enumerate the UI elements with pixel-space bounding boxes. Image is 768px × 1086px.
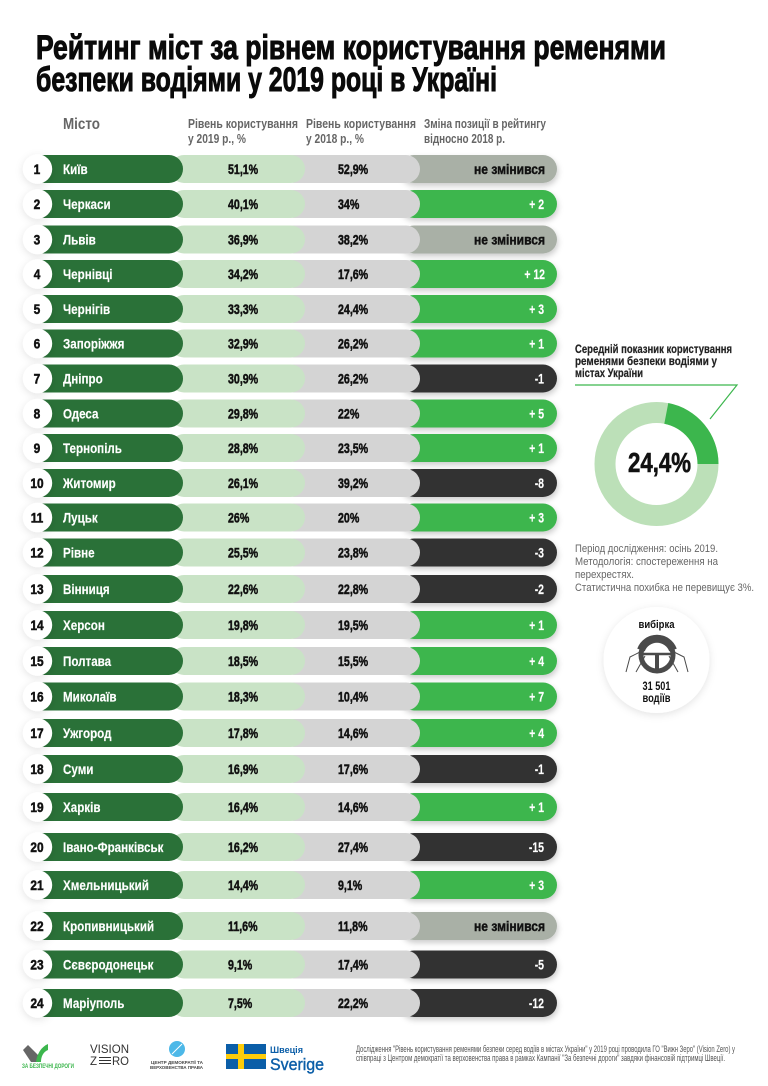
- footnote: [356, 1044, 735, 1063]
- row 6 Запоріжжя: 26,2%: [338, 336, 368, 352]
- logo: Vision Zero: VISION: [90, 1044, 129, 1056]
- row 22 Кропивницький: не змінився: [474, 918, 545, 934]
- row 6 Запоріжжя: + 1: [529, 336, 544, 352]
- row 8 Одеса: 22%: [338, 406, 359, 422]
- row 5 Чернігів: Чернігів: [63, 301, 110, 317]
- sample badge: 31 501: [642, 681, 671, 693]
- row 23 Сєвєродонецьк: Сєвєродонецьк: [63, 956, 154, 973]
- row 11 Луцьк: Луцьк: [63, 509, 98, 526]
- column headers: Рівень користування: [188, 117, 298, 131]
- row 13 Вінниця: -2: [535, 582, 544, 597]
- methodology text: Методологія: спостереження на: [575, 556, 719, 568]
- average heading: ременями безпеки водіями у: [575, 356, 718, 368]
- row 5 Чернігів: 33,3%: [228, 302, 258, 317]
- row 18 Суми: 16,9%: [228, 762, 258, 777]
- row 16 Миколаїв: 10,4%: [338, 689, 368, 705]
- methodology text: перехрестях.: [575, 569, 634, 581]
- logo: Центр демократії та верховенства права: ВЕРХОВЕНСТВА ПРАВА: [150, 1065, 204, 1070]
- row 18 Суми: -1: [535, 762, 544, 777]
- methodology text: [575, 543, 754, 594]
- row 15 Полтава: [23, 646, 557, 676]
- logo: За безпечні дороги: [22, 1044, 74, 1070]
- column headers: Зміна позиції в рейтингу: [424, 117, 546, 131]
- row 16 Миколаїв: [23, 682, 557, 711]
- row 11 Луцьк: [23, 503, 557, 532]
- row 7 Дніпро: 7: [34, 371, 40, 387]
- donut chart 24,4%: [605, 403, 719, 516]
- row 2 Черкаси: 34%: [338, 197, 359, 212]
- row 24 Маріуполь: [23, 988, 557, 1018]
- logo: Центр демократії та верховенства права: ЦЕНТР ДЕМОКРАТІЇ ТА: [151, 1059, 204, 1065]
- row 6 Запоріжжя: 32,9%: [228, 336, 258, 352]
- row 13 Вінниця: Вінниця: [63, 581, 110, 597]
- row 19 Харків: + 1: [529, 800, 544, 815]
- logo: Швеція Sverige: Швеція: [270, 1045, 303, 1055]
- row 13 Вінниця: 22,8%: [338, 582, 368, 597]
- row 12 Рівне: 23,8%: [338, 545, 368, 561]
- row 20 Івано-Франківськ: 16,2%: [228, 840, 258, 855]
- average heading: Середній показник користування: [575, 344, 732, 356]
- row 21 Хмельницький: Хмельницький: [63, 877, 149, 893]
- title: безпеки водіями у 2019 році в Україні: [36, 61, 497, 99]
- row 13 Вінниця: 13: [30, 581, 44, 597]
- row 9 Тернопіль: Тернопіль: [63, 440, 122, 456]
- row 1 Київ: Київ: [63, 161, 88, 177]
- row 6 Запоріжжя: 6: [34, 336, 40, 352]
- row 4 Чернівці: 34,2%: [228, 267, 258, 282]
- row 13 Вінниця: 22,6%: [228, 582, 258, 597]
- sample badge: [604, 607, 710, 713]
- row 3 Львів: 36,9%: [228, 232, 258, 248]
- column headers: Місто: [63, 116, 100, 133]
- row 22 Кропивницький: 11,8%: [338, 919, 368, 934]
- row 21 Хмельницький: 21: [30, 877, 44, 893]
- row 15 Полтава: + 4: [529, 654, 544, 669]
- row 16 Миколаїв: Миколаїв: [63, 688, 117, 705]
- row 17 Ужгород: + 4: [529, 726, 544, 741]
- row 22 Кропивницький: Кропивницький: [63, 918, 154, 934]
- row 24 Маріуполь: -12: [529, 996, 544, 1011]
- row 14 Херсон: [23, 610, 557, 640]
- row 17 Ужгород: 17: [30, 725, 44, 741]
- row 20 Івано-Франківськ: -15: [529, 840, 544, 855]
- logo: Vision Zero: Z: [90, 1056, 97, 1068]
- row 19 Харків: 19: [30, 799, 44, 815]
- row 4 Чернівці: 4: [34, 266, 41, 282]
- row 16 Миколаїв: 18,3%: [228, 689, 258, 705]
- row 2 Черкаси: 40,1%: [228, 197, 258, 212]
- sample badge: водіїв: [642, 693, 670, 705]
- row 7 Дніпро: 26,2%: [338, 371, 368, 387]
- row 5 Чернігів: + 3: [529, 302, 544, 317]
- row 3 Львів: 38,2%: [338, 232, 368, 248]
- row 4 Чернівці: 17,6%: [338, 267, 368, 282]
- row 9 Тернопіль: 9: [34, 440, 40, 456]
- row 17 Ужгород: 17,8%: [228, 726, 258, 741]
- row 18 Суми: [23, 754, 557, 784]
- row 12 Рівне: [23, 538, 557, 567]
- row 20 Івано-Франківськ: Івано-Франківськ: [63, 839, 164, 855]
- row 20 Івано-Франківськ: 20: [30, 839, 44, 855]
- row 22 Кропивницький: 22: [30, 918, 44, 934]
- row 14 Херсон: 19,5%: [338, 618, 368, 633]
- row 9 Тернопіль: 23,5%: [338, 441, 368, 456]
- logo: Центр демократії та верховенства права: [150, 1041, 204, 1070]
- row 11 Луцьк: 11: [31, 510, 43, 526]
- row 1 Київ: 51,1%: [228, 162, 258, 177]
- row 3 Львів: 3: [34, 232, 40, 248]
- row 7 Дніпро: 30,9%: [228, 371, 258, 387]
- logo: За безпечні дороги: ЗА БЕЗПЕЧНІ ДОРОГИ: [22, 1064, 74, 1070]
- row 23 Сєвєродонецьк: [23, 950, 557, 979]
- methodology text: Період дослідження: осінь 2019.: [575, 543, 718, 555]
- icon: steering wheel with hands: [626, 639, 688, 672]
- row 1 Київ: [23, 154, 557, 184]
- row 21 Хмельницький: [23, 870, 557, 900]
- column headers: відносно 2018 р.: [424, 132, 505, 146]
- row 15 Полтава: 15,5%: [338, 654, 368, 669]
- row 15 Полтава: Полтава: [63, 653, 112, 669]
- row 16 Миколаїв: 16: [30, 689, 44, 705]
- column headers: у 2019 р., %: [188, 132, 246, 146]
- row 11 Луцьк: 20%: [338, 510, 359, 526]
- row 6 Запоріжжя: [23, 329, 557, 358]
- row 17 Ужгород: [23, 718, 557, 748]
- row 14 Херсон: 19,8%: [228, 618, 258, 633]
- row 18 Суми: 18: [30, 761, 44, 777]
- row 21 Хмельницький: 9,1%: [338, 878, 362, 893]
- row 11 Луцьк: 26%: [228, 510, 249, 526]
- row 12 Рівне: 12: [30, 545, 44, 561]
- row 1 Київ: 52,9%: [338, 162, 368, 177]
- row 10 Житомир: 39,2%: [338, 476, 368, 491]
- row 2 Черкаси: [23, 189, 557, 219]
- row 24 Маріуполь: 22,2%: [338, 996, 368, 1011]
- row 11 Луцьк: + 3: [529, 510, 544, 526]
- row 16 Миколаїв: + 7: [529, 689, 544, 705]
- row 17 Ужгород: 14,6%: [338, 726, 368, 741]
- row 19 Харків: [23, 792, 557, 822]
- row 24 Маріуполь: 24: [30, 995, 44, 1011]
- row 13 Вінниця: [23, 574, 557, 604]
- row 18 Суми: Суми: [63, 761, 94, 777]
- row 10 Житомир: Житомир: [62, 475, 116, 491]
- row 5 Чернігів: [23, 294, 557, 324]
- row 1 Київ: не змінився: [474, 161, 545, 177]
- row 1 Київ: 1: [34, 161, 40, 177]
- row 2 Черкаси: Черкаси: [63, 196, 111, 212]
- row 24 Маріуполь: Маріуполь: [63, 995, 124, 1011]
- column headers: у 2018 р., %: [306, 132, 364, 146]
- row 14 Херсон: Херсон: [63, 617, 105, 633]
- row 23 Сєвєродонецьк: 9,1%: [228, 957, 252, 973]
- row 12 Рівне: 25,5%: [228, 545, 258, 561]
- row 23 Сєвєродонецьк: 23: [30, 957, 44, 973]
- row 20 Івано-Франківськ: [23, 832, 557, 862]
- row 9 Тернопіль: [23, 433, 557, 463]
- ranking table: [23, 154, 557, 1018]
- row 4 Чернівці: + 12: [524, 267, 545, 282]
- row 18 Суми: 17,6%: [338, 762, 368, 777]
- logo: Vision Zero: RO: [112, 1056, 129, 1068]
- average heading: містах України: [575, 368, 643, 380]
- row 5 Чернігів: 5: [34, 301, 40, 317]
- row 23 Сєвєродонецьк: -5: [535, 957, 544, 973]
- column headers: Рівень користування: [306, 117, 416, 131]
- row 10 Житомир: -8: [535, 476, 544, 491]
- row 4 Чернівці: Чернівці: [63, 266, 112, 282]
- row 10 Житомир: [23, 468, 557, 498]
- row 20 Івано-Франківськ: 27,4%: [338, 840, 368, 855]
- row 9 Тернопіль: 28,8%: [228, 441, 258, 456]
- row 17 Ужгород: Ужгород: [63, 725, 112, 741]
- row 15 Полтава: 15: [30, 653, 44, 669]
- row 2 Черкаси: + 2: [529, 197, 544, 212]
- row 24 Маріуполь: 7,5%: [228, 996, 252, 1011]
- logo: Швеція Sverige: [226, 1044, 324, 1074]
- row 10 Житомир: 10: [30, 475, 44, 491]
- callout line: [575, 385, 737, 419]
- row 19 Харків: 16,4%: [228, 800, 258, 815]
- row 7 Дніпро: -1: [535, 371, 544, 387]
- row 8 Одеса: + 5: [529, 406, 544, 422]
- sample badge: вибірка: [638, 619, 675, 631]
- row 3 Львів: [23, 225, 557, 254]
- row 3 Львів: не змінився: [474, 232, 545, 248]
- row 9 Тернопіль: + 1: [529, 441, 544, 456]
- row 4 Чернівці: [23, 259, 557, 289]
- row 8 Одеса: Одеса: [63, 405, 99, 422]
- logo: Vision Zero: [90, 1044, 129, 1068]
- donut chart 24,4%: 24,4%: [628, 447, 691, 478]
- row 23 Сєвєродонецьк: 17,4%: [338, 957, 368, 973]
- row 15 Полтава: 18,5%: [228, 654, 258, 669]
- row 8 Одеса: 29,8%: [228, 406, 258, 422]
- row 7 Дніпро: Дніпро: [63, 370, 103, 387]
- row 10 Житомир: 26,1%: [228, 476, 258, 491]
- row 5 Чернігів: 24,4%: [338, 302, 368, 317]
- average heading: [575, 344, 732, 380]
- row 8 Одеса: [23, 399, 557, 428]
- column headers: [63, 116, 546, 146]
- row 14 Херсон: + 1: [529, 618, 544, 633]
- row 12 Рівне: Рівне: [63, 544, 95, 561]
- row 3 Львів: Львів: [63, 231, 96, 248]
- row 21 Хмельницький: 14,4%: [228, 878, 258, 893]
- row 6 Запоріжжя: Запоріжжя: [63, 335, 124, 352]
- row 21 Хмельницький: + 3: [529, 878, 544, 893]
- row 12 Рівне: -3: [535, 545, 544, 561]
- row 7 Дніпро: [23, 364, 557, 393]
- row 2 Черкаси: 2: [34, 196, 40, 212]
- row 8 Одеса: 8: [34, 406, 40, 422]
- row 22 Кропивницький: 11,6%: [228, 919, 258, 934]
- row 14 Херсон: 14: [30, 617, 44, 633]
- row 19 Харків: 14,6%: [338, 800, 368, 815]
- title: [36, 29, 666, 99]
- row 19 Харків: Харків: [63, 799, 101, 815]
- logo: Швеція Sverige: Sverige: [270, 1055, 324, 1074]
- row 22 Кропивницький: [23, 911, 557, 941]
